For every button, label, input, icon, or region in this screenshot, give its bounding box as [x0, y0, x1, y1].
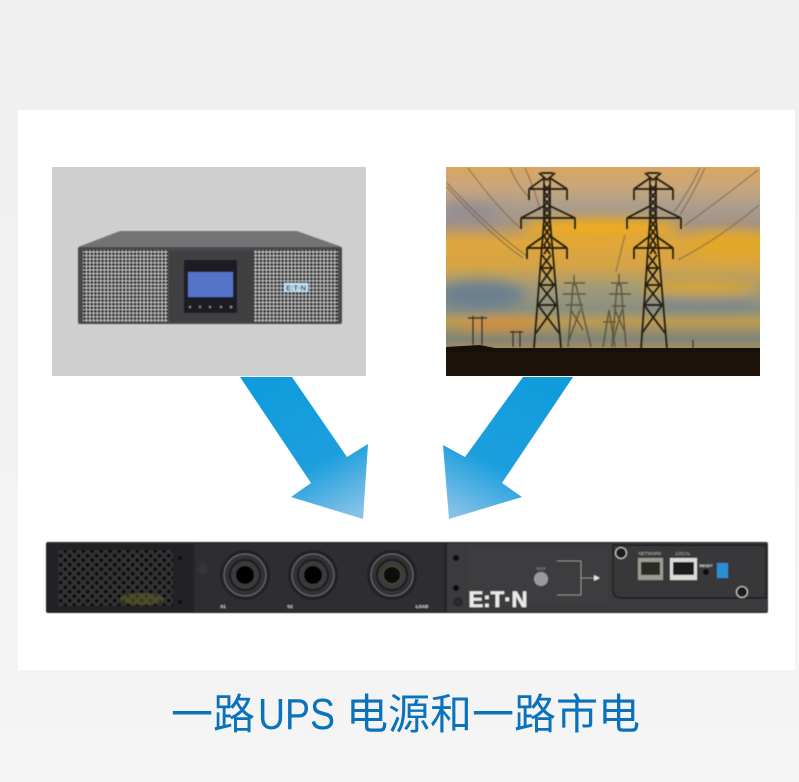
test button: TEST	[536, 566, 547, 571]
ground	[446, 348, 760, 376]
centre panel	[169, 251, 254, 322]
vented section	[47, 544, 193, 612]
local port	[670, 551, 697, 580]
caption: 路	[213, 691, 255, 738]
caption: 路	[514, 691, 556, 738]
LCD screen	[188, 272, 233, 297]
connector section	[195, 543, 444, 612]
local port: LOCAL	[676, 551, 691, 556]
DIP switch	[717, 563, 728, 578]
photo: power transmission towers at sunset	[435, 167, 770, 376]
network port	[638, 551, 663, 580]
LCD buttons	[189, 306, 232, 308]
caption: 一	[171, 691, 213, 738]
tower right	[627, 173, 681, 349]
connector S1	[220, 550, 270, 600]
Eaton badge on UPS: E:T·N	[286, 284, 306, 292]
connector labels: LOAD	[416, 604, 429, 609]
connector labels: S1	[220, 604, 226, 609]
connector load	[367, 550, 417, 600]
transmission wires	[447, 168, 759, 272]
right ventilation grille	[254, 250, 338, 322]
connector labels: S2	[287, 604, 293, 609]
reset button	[699, 563, 713, 575]
photo: UPS unit on grey background	[52, 167, 366, 376]
ground haze	[446, 345, 760, 352]
utility poles	[468, 316, 693, 348]
caption: 一	[472, 691, 514, 738]
caption: 源	[388, 691, 430, 738]
rack-mounted transfer switch	[46, 542, 768, 613]
caption: 市	[556, 691, 598, 738]
network port: NETWORK	[638, 551, 662, 556]
caption: UPS	[258, 690, 335, 739]
connector labels	[220, 604, 429, 609]
control section	[447, 543, 768, 612]
LCD bezel	[184, 260, 237, 313]
UPS top face	[78, 231, 342, 247]
Eaton logo: E:T·N	[468, 587, 528, 612]
reset button: RESET	[699, 563, 713, 568]
control module	[613, 545, 766, 598]
caption: 和	[430, 691, 472, 738]
caption: 电	[346, 691, 388, 738]
left ventilation grille	[83, 250, 168, 322]
arrow: UPS to switch	[240, 377, 368, 519]
white content panel	[18, 110, 795, 670]
distant towers	[563, 274, 631, 347]
tower left	[521, 173, 575, 348]
sky colour bands	[435, 202, 770, 330]
caption: 电	[598, 691, 640, 738]
test button	[534, 566, 548, 586]
UPS front body	[78, 247, 342, 324]
chassis	[46, 542, 768, 613]
source schematic	[557, 561, 600, 595]
arrow: utility power to switch	[443, 377, 573, 519]
connector S2	[288, 550, 338, 600]
